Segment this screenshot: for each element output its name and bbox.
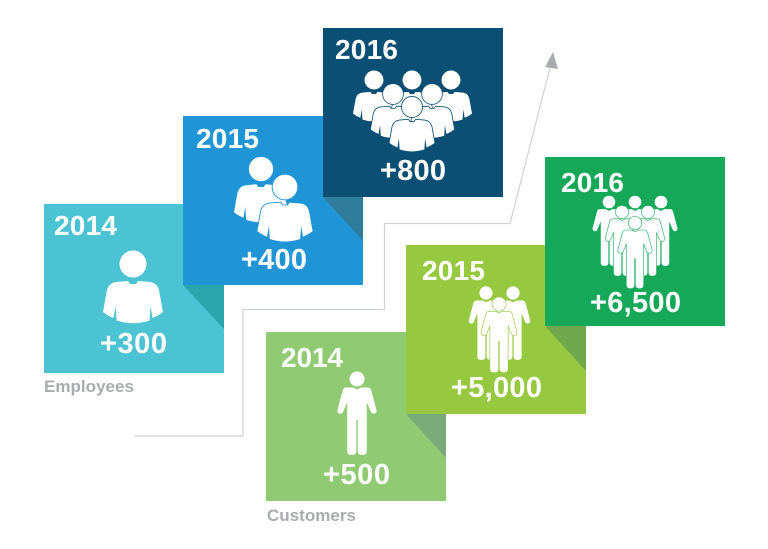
label: Customers: Customers [267,506,356,525]
panel: customers 2016 [545,157,725,371]
fold shadow on 2015 panel [323,197,363,241]
fold shadow on 2014 panel [406,414,446,458]
fold shadow on 2015 panel [545,326,586,371]
value +300: +300 [100,328,167,360]
icon: two employees [234,157,313,242]
icon: one employee [103,250,163,323]
panel: employees 2015 [183,116,363,329]
value +400: +400 [241,244,307,276]
panel: employees 2014 [44,204,224,373]
panel: customers 2015 [406,245,586,458]
year label 2015: 2015 [422,255,485,286]
fold shadow on 2014 panel [183,285,224,329]
icon: customer group [593,196,677,288]
year label 2014: 2014 [281,342,343,373]
panel: customers 2014 [266,332,446,501]
value +800: +800 [380,155,446,187]
growth arrow [134,52,558,436]
value +6,500: +6,500 [590,287,681,319]
value +500: +500 [323,459,390,491]
year label 2016: 2016 [561,167,624,198]
year label 2016: 2016 [335,34,398,65]
icon: employee group [353,71,472,151]
panel: employees 2016 [323,28,503,241]
year label 2014: 2014 [54,210,117,241]
icon: three customers [469,286,530,372]
value +5,000: +5,000 [451,372,542,404]
icon: one customer [337,372,377,455]
label: Employees: Employees [44,377,134,396]
year label 2015: 2015 [196,123,259,154]
